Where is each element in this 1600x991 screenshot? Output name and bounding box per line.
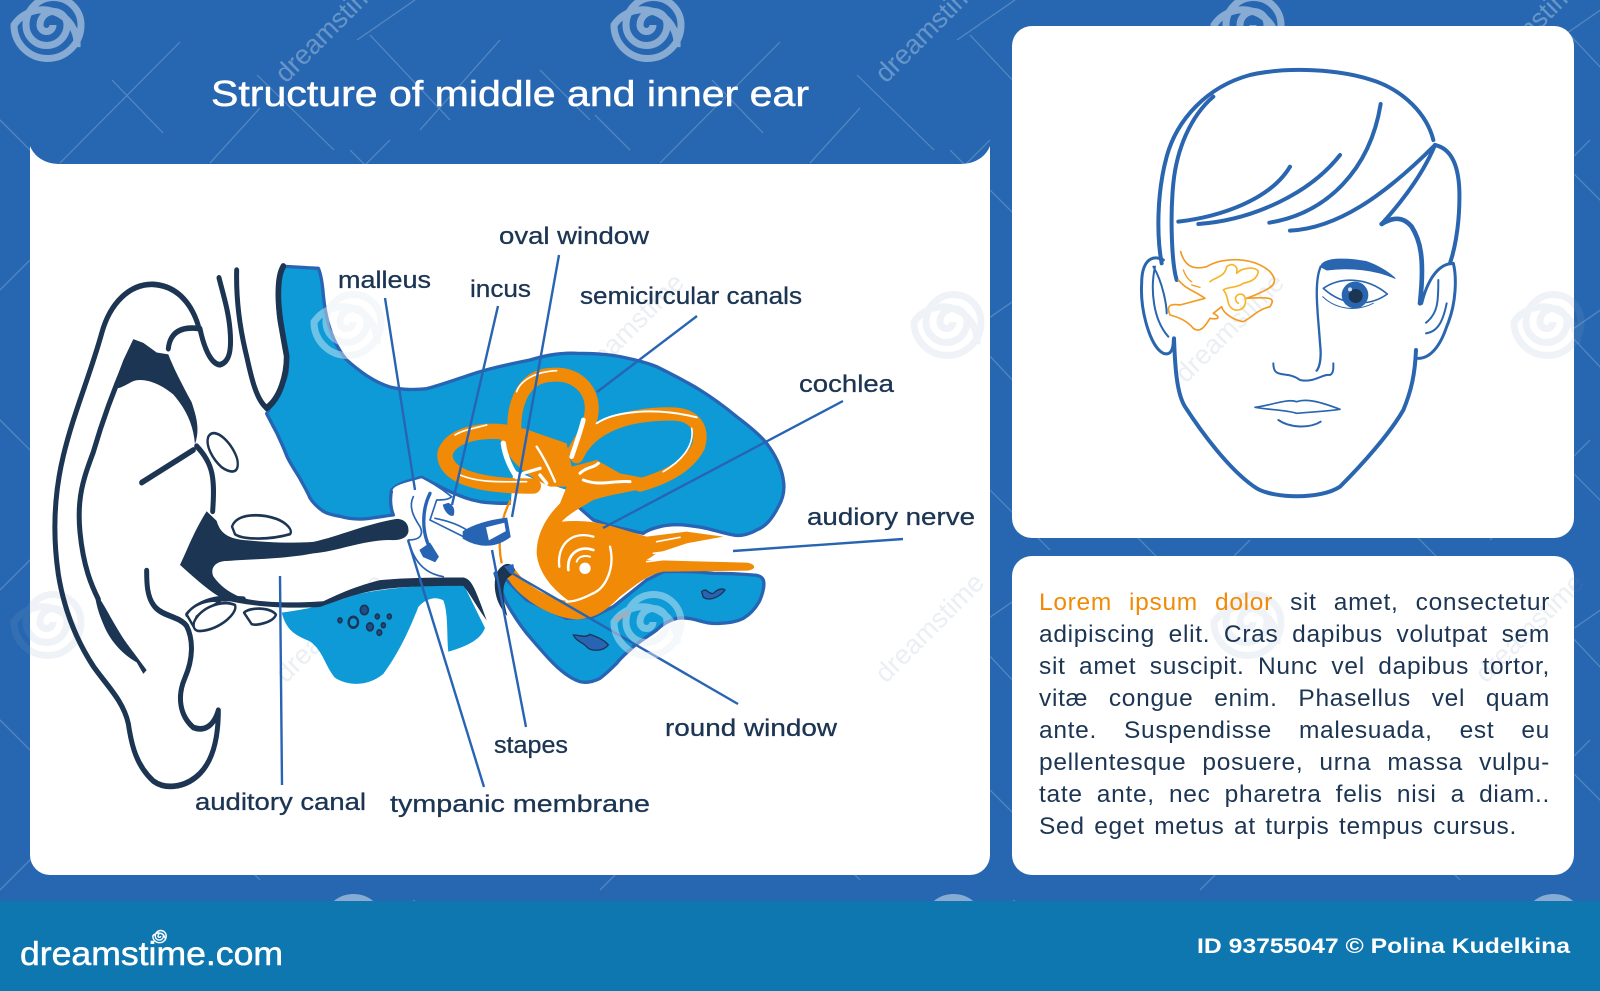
description text: tate ante, nec pharetra felis nisi a diam.. <box>1039 781 1550 808</box>
ossicle chain <box>392 477 510 577</box>
panel: ear diagram <box>30 146 990 875</box>
panel: face <box>1012 26 1574 538</box>
labels: audiory nerve <box>807 504 975 531</box>
lower right temporal bone <box>495 571 764 682</box>
cochlea centre dot <box>579 563 591 574</box>
round window edge <box>495 564 515 616</box>
faint watermarks on panels <box>14 267 1590 688</box>
description text: adipiscing elit. Cras dapibus volutpat sem <box>1039 621 1550 648</box>
orange cavity outline <box>500 500 511 563</box>
lower left blue mastoid <box>282 584 485 684</box>
labels: malleus <box>338 267 431 294</box>
labels: auditory canal <box>195 789 366 816</box>
labels: tympanic membrane <box>390 791 650 818</box>
outer ear <box>55 266 487 786</box>
footer bar <box>0 901 1600 991</box>
semicircular canal loops <box>445 375 700 486</box>
labels: cochlea <box>799 371 895 398</box>
faint watermarks on panels: dreamstime <box>569 267 690 388</box>
upper temporal bone <box>267 266 784 536</box>
description text <box>1039 589 1550 840</box>
face illustration <box>1141 70 1459 496</box>
title: Structure of middle and inner ear <box>211 73 809 114</box>
ear cartilage fills <box>95 339 487 674</box>
labels: oval window <box>499 223 650 250</box>
cochlea coil <box>547 528 613 595</box>
labels: stapes <box>494 732 568 759</box>
footer logo spiral <box>153 930 166 943</box>
image credit: ID 93755047 © Polina Kudelkina <box>1197 935 1570 958</box>
white watermark overlay on diagram <box>314 294 681 656</box>
panel: description <box>1012 556 1574 875</box>
white highlights <box>455 371 697 602</box>
inner ear labyrinth <box>392 371 764 682</box>
faint watermarks on panels: dreamstime <box>869 567 990 688</box>
labels <box>195 223 975 818</box>
small dark dots <box>338 605 391 635</box>
faint watermarks on panels: dreamstime <box>1169 267 1290 388</box>
footer logo text: dreamstime.com <box>20 935 283 972</box>
labels: semicircular canals <box>580 283 802 310</box>
faint watermarks on panels: dreamstime <box>269 567 390 688</box>
blue patches <box>573 589 725 650</box>
vestibule and cochlea body <box>498 428 754 619</box>
description text: pellentesque posuere, urna massa vulpu- <box>1039 749 1550 776</box>
description text: sit amet suscipit. Nunc vel dapibus tortor, <box>1039 653 1550 680</box>
description text: Sed eget metus at turpis tempus cursus. <box>1039 813 1517 840</box>
description text: Lorem ipsum dolor sit amet, consectetur <box>1039 589 1550 616</box>
leader lines <box>280 255 903 787</box>
small cartilage ovals <box>187 433 291 631</box>
white cavity <box>500 470 570 603</box>
faint watermarks on panels: dreamstime <box>1469 567 1590 688</box>
small orange ear on face <box>1168 252 1274 330</box>
description text: ante. Suspendisse malesuada, est eu <box>1039 717 1550 744</box>
description text: vitæ congue enim. Phasellus vel quam <box>1039 685 1550 712</box>
labels: incus <box>470 276 531 303</box>
labels: round window <box>665 715 838 742</box>
